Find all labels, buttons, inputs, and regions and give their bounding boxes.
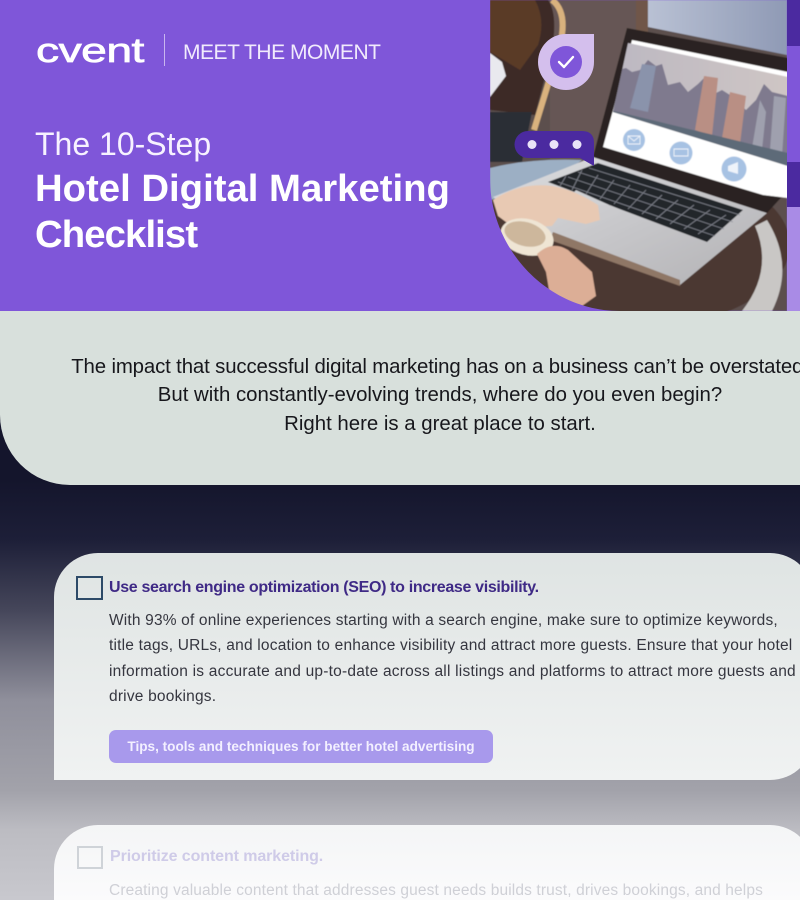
intro text: But with constantly-evolving trends, where do you even begin?	[158, 384, 722, 406]
icon: check badge	[538, 34, 594, 90]
hand 2	[537, 246, 596, 306]
keyboard	[548, 163, 743, 242]
link button: Tips, tools and techniques for better hotel advertising	[127, 739, 475, 754]
intro text	[71, 356, 800, 435]
logo divider	[164, 34, 165, 66]
laptop screen	[593, 28, 788, 213]
step body: Creating valuable content that addresses guest needs builds trust, drives bookings, and helps	[109, 882, 763, 899]
step body: With 93% of online experiences starting with a search engine, make sure to optimize keywords,	[109, 612, 778, 629]
right colour strip	[787, 0, 800, 311]
title	[35, 126, 450, 256]
checkbox	[77, 846, 103, 869]
step body	[109, 612, 796, 705]
cafe table	[492, 202, 787, 311]
hand	[493, 185, 600, 228]
step heading: Use search engine optimization (SEO) to increase visibility.	[109, 579, 539, 596]
trackpad	[574, 189, 616, 207]
card: step 2 content marketing	[54, 825, 800, 900]
title line 2: Hotel Digital Marketing	[35, 167, 450, 210]
intro text: Right here is a great place to start.	[284, 413, 596, 435]
tagline: MEET THE MOMENT	[183, 41, 381, 64]
intro text: The impact that successful digital marketing has on a business can’t be overstated.	[71, 356, 800, 378]
step body: drive bookings.	[109, 688, 216, 705]
step body: title tags, URLs, and location to enhance visibility and attract more guests. Ensure that your hotel	[109, 637, 792, 654]
header panel	[0, 0, 800, 311]
laptop screen icons	[623, 129, 645, 151]
logo: cvent: cvent	[36, 32, 144, 70]
step body: information is accurate and up-to-date across all listings and platforms to attract more guests and	[109, 663, 796, 680]
intro panel	[0, 311, 800, 485]
title line 1: The 10-Step	[35, 126, 211, 162]
coffee cup	[500, 218, 554, 257]
card: step 1 SEO	[54, 553, 800, 780]
checkbox	[76, 576, 103, 600]
icon: chat bubble	[514, 131, 594, 166]
title line 3: Checklist	[35, 213, 197, 256]
link button	[109, 730, 493, 763]
laptop base	[493, 157, 767, 285]
photo: laptop on cafe table	[490, 0, 800, 311]
step heading: Prioritize content marketing.	[110, 848, 323, 865]
